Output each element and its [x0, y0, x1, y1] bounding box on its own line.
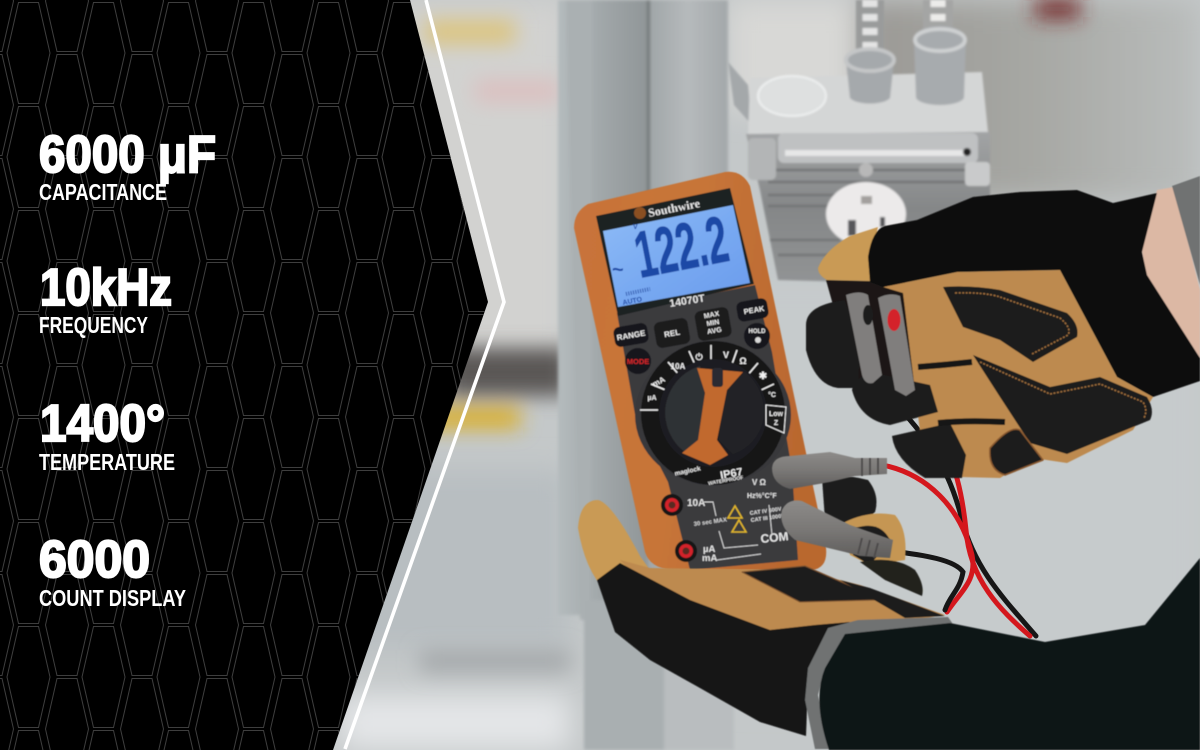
jack labels and warnings: µA — [703, 544, 715, 555]
stat: frequency: 10kHz — [40, 259, 172, 317]
black sleeve — [819, 558, 1200, 750]
rotary dial: µA — [647, 395, 657, 402]
thumb pad — [990, 429, 1043, 475]
background: steel studs — [558, 0, 734, 750]
rating badges: IP67 — [719, 466, 744, 482]
LCD reading — [612, 201, 734, 307]
rotary dial: V — [723, 350, 729, 360]
black glove back — [597, 563, 850, 736]
LCD reading: ~ — [612, 259, 624, 281]
buttons: MODE — [627, 357, 649, 366]
buttons: RANGE — [616, 328, 647, 342]
buttons: MIN — [706, 319, 720, 328]
conduit connectors — [846, 0, 966, 105]
jack labels and warnings: Hz%°C°F — [747, 492, 777, 500]
thumb tip — [818, 227, 878, 281]
LCD reading: AUTO — [622, 296, 643, 307]
rotary dial: 10A — [671, 362, 686, 371]
stat: capacitance: 6000 μF — [39, 126, 216, 184]
buttons: AVG — [707, 327, 723, 336]
model number: 14070T — [669, 292, 706, 310]
control panel — [617, 285, 798, 570]
forearm skin — [1142, 187, 1200, 358]
finger 3 — [892, 423, 966, 478]
black back of hand — [868, 190, 1200, 397]
brand: Southwire — [647, 196, 702, 220]
stat: count display: 6000 — [39, 531, 150, 589]
jack labels and warnings: CAT IV 600V — [749, 507, 782, 517]
finger 2 — [852, 373, 938, 425]
stat: count display: COUNT DISPLAY — [39, 585, 186, 611]
white chevron outline — [345, 0, 504, 749]
rotary dial: Low — [769, 411, 784, 418]
grip pad upper — [943, 286, 1078, 362]
finger gaps — [918, 362, 1005, 423]
stat: capacitance — [39, 126, 216, 205]
buttons: MAX — [703, 311, 720, 320]
grip pad lower — [973, 355, 1152, 454]
rotary dial: ⏻ — [695, 352, 703, 362]
lower hand: palm and thumb — [578, 500, 1200, 750]
buttons — [613, 297, 770, 374]
rating badges: maglock — [674, 465, 702, 478]
LCD screen — [603, 205, 750, 307]
rotary dial: Z — [774, 420, 779, 427]
rotary dial: ✱ — [759, 371, 768, 382]
left panel: black chevron with hexagon pattern — [0, 0, 500, 750]
red and black test leads — [873, 380, 1036, 636]
rotary dial: °C — [768, 391, 776, 399]
rotary dial: Ω — [739, 356, 747, 366]
dark shadow behind fingers — [826, 280, 935, 400]
upper hand: gloved right hand — [806, 176, 1200, 478]
multimeter body — [574, 172, 826, 570]
grey cuff — [805, 617, 955, 749]
jack labels and warnings: COM — [760, 529, 789, 546]
rotary dial: mA — [651, 375, 667, 389]
stat: capacitance: CAPACITANCE — [39, 179, 167, 205]
tan palm — [883, 270, 1153, 478]
finger 1 — [806, 300, 860, 388]
jack labels and warnings — [687, 478, 789, 564]
orange housing — [574, 172, 826, 570]
jack labels and warnings: mA — [702, 553, 717, 564]
outlet — [826, 182, 906, 246]
stat: count display — [39, 531, 186, 611]
jack labels and warnings: CAT III 1000V — [750, 513, 786, 524]
grey sleeve — [1172, 176, 1200, 285]
electrical box with outlet — [728, 0, 990, 285]
tan thumb — [578, 500, 650, 610]
rating badges — [674, 465, 744, 487]
buttons: REL — [663, 328, 681, 339]
rating badges: WATERPROOF — [708, 475, 744, 487]
stat: temperature: TEMPERATURE — [39, 449, 175, 475]
LCD reading: V — [633, 224, 638, 231]
buttons: HOLD — [748, 329, 766, 335]
tan palm strip — [620, 560, 945, 640]
input jacks — [661, 494, 697, 562]
test probes plugged into meter — [772, 452, 893, 558]
buttons: PEAK — [743, 304, 766, 316]
jack labels and warnings: V Ω — [752, 478, 767, 487]
jack labels and warnings: 30 sec MAX — [693, 517, 727, 528]
stat: frequency — [39, 259, 172, 338]
lower hand: fingers behind meter — [822, 476, 923, 596]
upper probes — [846, 292, 915, 396]
LCD reading: 122.2 — [629, 201, 734, 292]
palm pad — [742, 566, 875, 602]
stat: frequency: FREQUENCY — [39, 312, 148, 338]
rotary dial — [635, 341, 791, 485]
jack labels and warnings: 10A — [687, 498, 705, 509]
LCD bezel — [596, 188, 754, 316]
stat: temperature: 1400° — [40, 395, 165, 453]
